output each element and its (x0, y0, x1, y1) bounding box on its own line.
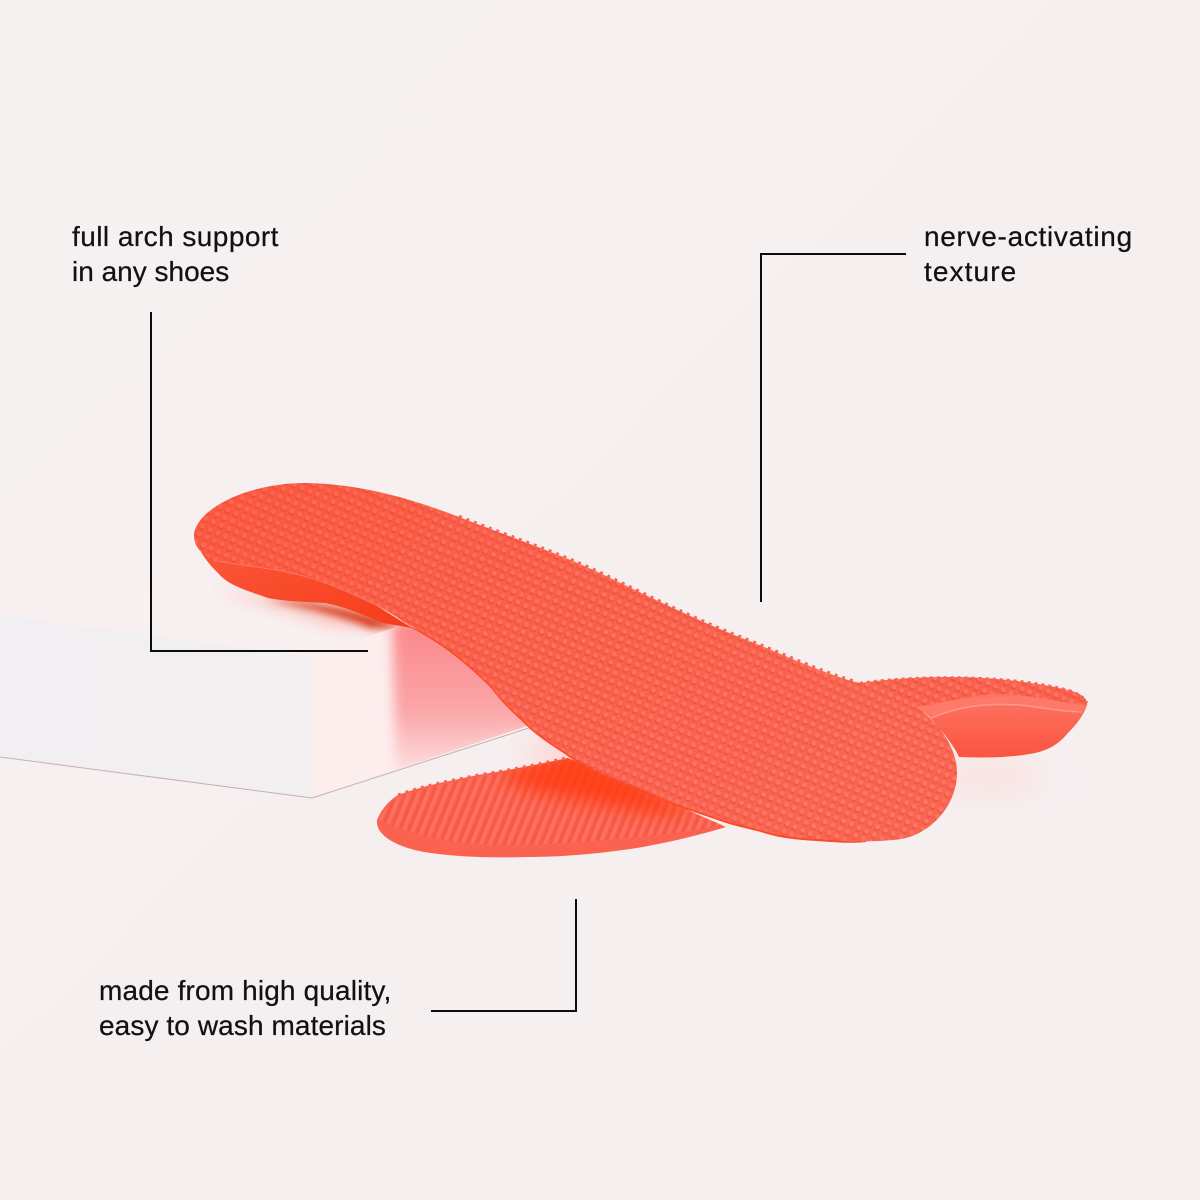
product illustration with callout lines (0, 253, 1088, 1012)
label: arch support: in any shoes (72, 256, 229, 287)
label: arch support: full arch support (72, 221, 279, 252)
label: arch support (72, 221, 279, 288)
label: texture: nerve-activating (924, 221, 1133, 252)
white block (0, 575, 550, 798)
main insole (194, 483, 957, 842)
label: texture (924, 221, 1133, 287)
callout line: materials (431, 899, 576, 1011)
label: materials: made from high quality, (99, 975, 391, 1006)
front-left insole (377, 750, 726, 857)
label: materials: easy to wash materials (99, 1010, 386, 1041)
label: texture: texture (924, 256, 1017, 287)
floor glow under insoles (525, 737, 1045, 794)
lip under main insole (406, 625, 866, 843)
callout line: texture (761, 254, 906, 602)
callout line: arch support (151, 312, 368, 651)
heel underside of main insole (194, 535, 412, 628)
label: materials (99, 975, 391, 1042)
rear insole (860, 677, 1087, 758)
